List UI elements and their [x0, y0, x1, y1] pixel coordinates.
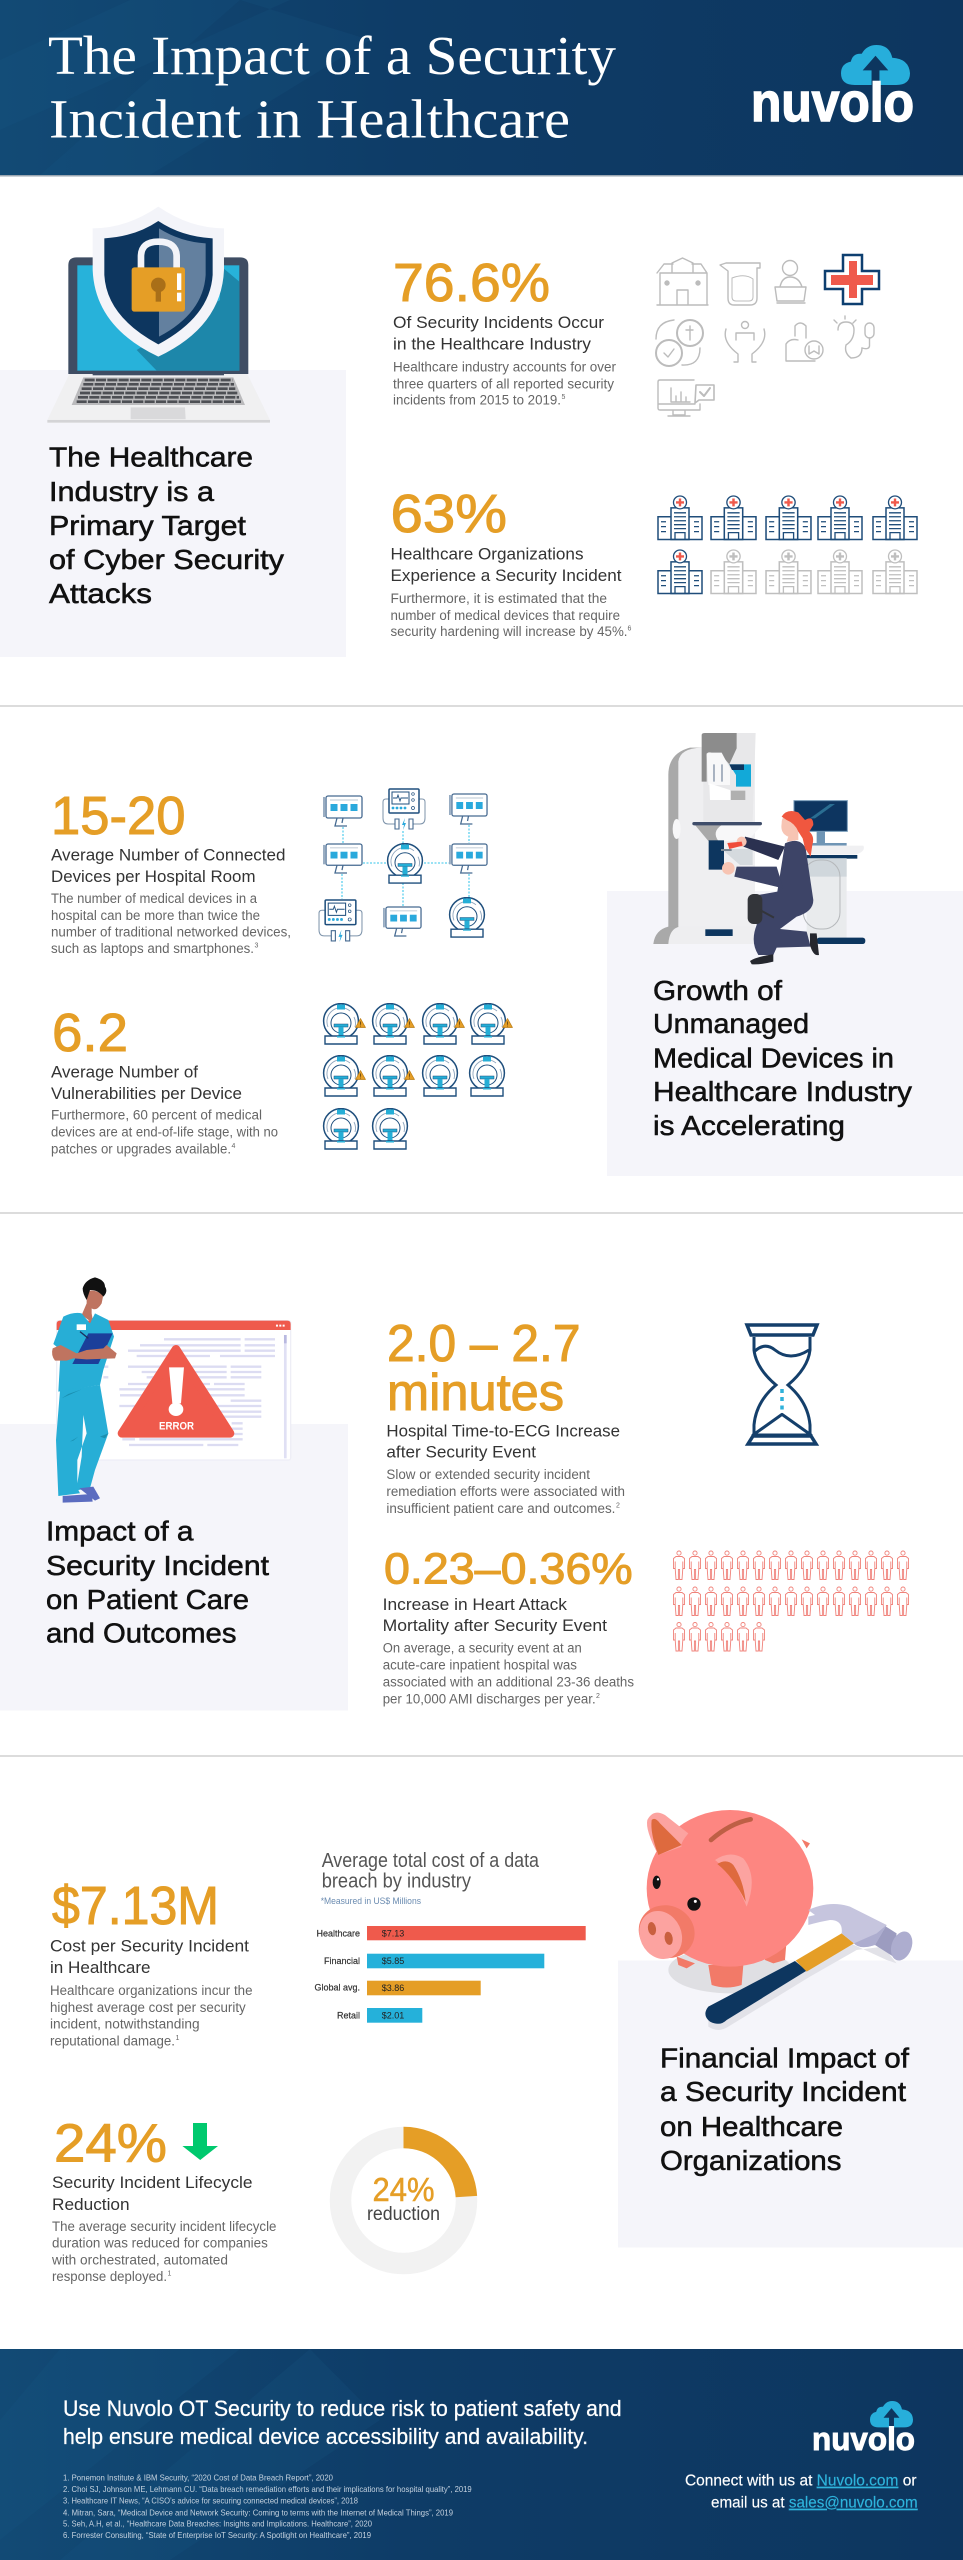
heading: unmanaged devices: Healthcare Industry [653, 1076, 912, 1107]
stat: 76.6% [393, 253, 617, 408]
stat: 15-20: such as laptops and smartphones. [51, 941, 254, 956]
stat: 6.2: 4 [232, 1143, 236, 1150]
stat: 15-20: 3 [254, 942, 258, 950]
stat: 6.2: Vulnerabilities per Device [51, 1084, 242, 1103]
chart title: *Measured in US$ Millions [321, 1896, 421, 1907]
stat: $7.13M: 1 [176, 2035, 180, 2042]
stat: 63%: 63% [390, 484, 507, 544]
stat: 2.0 – 2.7 minutes [386, 1315, 625, 1516]
panel: primary target background [0, 370, 346, 657]
stat: 2.0 – 2.7 minutes: minutes [387, 1364, 564, 1422]
contact details: email us at sales@nuvolo.com [711, 2495, 918, 2512]
references: 1. Ponemon Institute & IBM Security, “2020 Cost of Data Breach Report”, 2020 [63, 2473, 333, 2483]
pig body [802, 1839, 810, 1848]
stat: $7.13M: in Healthcare [50, 1958, 150, 1977]
bar: healthcare: Healthcare [316, 1929, 360, 1939]
stat: 76.6%: 5 [562, 394, 566, 401]
stat: 76.6%: 76.6% [393, 253, 550, 313]
stat: 24% [54, 2113, 218, 2173]
icon: hourglass [747, 1325, 817, 1444]
heading: primary target: Industry is a [49, 476, 214, 507]
stat: 15-20 [51, 786, 291, 956]
stat: $7.13M: incident, notwithstanding [50, 2017, 200, 2032]
logo: footer nuvolo [812, 2401, 915, 2457]
references: 3. Healthcare IT News, “A CISO’s advice for securing connected medical devices”, 2018 [63, 2496, 358, 2506]
chart title: Average total cost of a data [322, 1850, 540, 1872]
stat: 76.6%: Healthcare industry accounts for over [393, 360, 617, 374]
stat: $7.13M: Cost per Security Incident [50, 1937, 249, 1956]
bar: global average: $3.86 [382, 1983, 404, 1993]
logo: nuvolo: nuvolo [751, 71, 914, 133]
heading: primary target: The Healthcare [49, 442, 253, 472]
icon: green down arrow [182, 2123, 218, 2160]
icons: people pictogram [674, 1551, 908, 1651]
references: 6. Forrester Consulting, “State of Enterprise IoT Security: A Spotlight on Healthcare”, 2019 [63, 2530, 371, 2540]
diagram: connected devices network [319, 789, 487, 942]
heading: primary target [49, 442, 284, 609]
icon: monitor with chart [658, 380, 714, 416]
stat: $7.13M: Healthcare organizations incur the [50, 1983, 252, 1998]
stat: 2.0 – 2.7 minutes: insufficient patient care and outcomes. [386, 1501, 615, 1516]
contact details [685, 2473, 918, 2512]
donut chart: 24% reduction [340, 2138, 466, 2264]
title: The Impact of a Security [48, 25, 617, 86]
stat: 0.23–0.36%: 0.23–0.36% [384, 1544, 633, 1593]
logo: nuvolo [751, 45, 914, 133]
hammer shadow [708, 1940, 897, 2030]
stat: 2.0 – 2.7 minutes: 2.0 – 2.7 [387, 1315, 580, 1373]
stat: 6.2: devices are at end-of-life stage, with no [51, 1124, 278, 1140]
icon: ear and mouse [834, 316, 874, 358]
bar: retail: $2.01 [382, 2011, 404, 2021]
bar: global average: Global avg. [314, 1982, 360, 1992]
references [63, 2473, 472, 2540]
desk and monitor [794, 801, 865, 944]
text: lifecycle reduction: Security Incident Lifecycle [52, 2173, 252, 2192]
panel: financial impact background [618, 1960, 963, 2248]
text: lifecycle reduction [51, 2173, 276, 2284]
stat: 2.0 – 2.7 minutes: Slow or extended security incident [386, 1467, 590, 1482]
references: 2. Choi SJ, Johnson ME, Lehmann CU. “Data breach remediation efforts and their implications for hospital quality”, 2019 [63, 2484, 472, 2494]
icon: person at laptop [775, 260, 806, 303]
stat: 63%: security hardening will increase by 45%. [390, 624, 628, 639]
technician [721, 811, 819, 964]
bar: financial: Financial [324, 1956, 360, 1966]
bar: financial: $5.85 [382, 1956, 404, 1966]
stat: 15-20: Devices per Hospital Room [51, 867, 256, 886]
illustration: error window: ERROR [159, 1420, 194, 1432]
stat: 15-20: 15-20 [51, 786, 186, 846]
donut chart: 24% reduction: 24% [372, 2171, 434, 2208]
stat: 15-20: Average Number of Connected [51, 846, 286, 864]
stat: 2.0 – 2.7 minutes: remediation efforts were associated with [386, 1484, 625, 1499]
stat: $7.13M: $7.13M [52, 1876, 219, 1936]
text: lifecycle reduction: 1 [168, 2270, 172, 2278]
heading: financial impact: on Healthcare [660, 2111, 843, 2142]
icons: industry grid [656, 255, 879, 416]
stat: 2.0 – 2.7 minutes: after Security Event [386, 1443, 536, 1462]
stat: 0.23–0.36%: Mortality after Security Event [383, 1616, 607, 1635]
stat: 2.0 – 2.7 minutes: Hospital Time-to-ECG Increase [386, 1421, 620, 1440]
stat: 0.23–0.36%: Increase in Heart Attack [383, 1595, 568, 1614]
stat: 0.23–0.36%: associated with an additional 23-36 deaths [383, 1674, 634, 1690]
heading: patient care [46, 1516, 269, 1649]
icons: hospitals 6.3 of 10 [658, 496, 917, 594]
stat: 24%: 24% [54, 2113, 167, 2173]
stat: 63%: Experience a Security Incident [390, 566, 622, 585]
heading: financial impact: Organizations [660, 2145, 842, 2176]
pig legs [765, 1940, 787, 1963]
stat: 0.23–0.36%: per 10,000 AMI discharges per year. [383, 1691, 596, 1706]
heading: unmanaged devices: is Accelerating [653, 1110, 845, 1141]
stat: $7.13M: reputational damage. [50, 2033, 175, 2048]
stat: 2.0 – 2.7 minutes: 2 [616, 1502, 620, 1510]
illustration: error window [57, 1321, 291, 1460]
panel: unmanaged devices background [607, 891, 963, 1176]
heading: primary target: Primary Target [49, 510, 246, 541]
title [48, 25, 617, 150]
text: lifecycle reduction: response deployed. [52, 2269, 167, 2284]
stat: 76.6%: Of Security Incidents Occur [393, 313, 604, 332]
warning triangle [122, 1349, 230, 1433]
donut chart: 24% reduction: reduction [367, 2204, 440, 2225]
shield [93, 207, 224, 357]
heading: financial impact: a Security Incident [660, 2076, 906, 2107]
stat: 15-20: number of traditional networked devices, [51, 924, 291, 940]
bar: global average [314, 1981, 481, 1995]
stat: 63%: number of medical devices that require [390, 608, 620, 623]
stat: 0.23–0.36%: 2 [596, 1693, 600, 1700]
stat: 63%: Furthermore, it is estimated that the [390, 591, 607, 606]
stat: 6.2: patches or upgrades available. [51, 1141, 231, 1156]
illustration: piggy bank and hammer [630, 1810, 916, 2030]
heading: unmanaged devices: Growth of [653, 975, 782, 1006]
stat: 0.23–0.36% [383, 1544, 634, 1706]
header banner [0, 0, 963, 176]
contact details: Connect with us at Nuvolo.com or [685, 2473, 916, 2490]
chart title: breach by industry [322, 1871, 471, 1893]
stat: 76.6%: in the Healthcare Industry [393, 334, 592, 354]
hammer [705, 1961, 807, 2024]
stat: 63%: Healthcare Organizations [390, 544, 584, 564]
heading: financial impact [660, 2043, 909, 2176]
references: 4. Mitran, Sara, “Medical Device and Network Security: Coming to terms with the Internet of Medical Things”, 2019 [63, 2507, 453, 2517]
padlock [141, 242, 177, 268]
stat: 76.6%: three quarters of all reported security [393, 376, 614, 392]
bar: retail [337, 2008, 422, 2023]
stat: 6.2: Average Number of [51, 1062, 198, 1082]
logo: footer nuvolo: nuvolo [812, 2421, 915, 2457]
stat: 6.2 [51, 1003, 278, 1156]
heading: unmanaged devices [653, 975, 912, 1141]
icon: money and check cycle [656, 320, 703, 366]
heading: primary target: Attacks [49, 578, 152, 609]
bar: retail: Retail [337, 2011, 360, 2021]
stat: $7.13M: highest average cost per security [50, 2000, 246, 2015]
icon: school building [657, 258, 708, 305]
icons: vulnerable devices grid [324, 1004, 512, 1149]
imaging machine [653, 733, 762, 944]
stat: 63% [390, 484, 632, 639]
stat: 15-20: hospital can be more than twice the [51, 908, 260, 923]
illustration: nurse [52, 1277, 117, 1503]
stat: 63%: 6 [628, 626, 632, 632]
stat: 76.6%: incidents from 2015 to 2019. [393, 392, 561, 408]
heading: patient care: and Outcomes [46, 1618, 236, 1649]
heading: unmanaged devices: Unmanaged [653, 1008, 809, 1039]
bar chart: average cost by industry [314, 1850, 586, 2023]
icon: caring hands [725, 322, 765, 362]
call to action: help ensure medical device accessibility and availability. [63, 2424, 588, 2449]
text: lifecycle reduction: with orchestrated, automated [51, 2253, 228, 2268]
bar: financial [324, 1954, 544, 1968]
heading: financial impact: Financial Impact of [660, 2043, 909, 2074]
chart title [321, 1850, 540, 1907]
stat: $7.13M [50, 1876, 252, 2048]
text: lifecycle reduction: Reduction [52, 2195, 130, 2214]
icon: medical cross [825, 255, 879, 304]
heading: primary target: of Cyber Security [49, 544, 284, 575]
icon: woman with book [786, 323, 823, 361]
icon: laptop with security shield [47, 207, 270, 423]
stat: 6.2: 6.2 [52, 1003, 128, 1063]
call to action [63, 2396, 622, 2449]
title: Incident in Healthcare [49, 88, 570, 150]
text: lifecycle reduction: duration was reduced for companies [52, 2236, 268, 2250]
heading: unmanaged devices: Medical Devices in [653, 1042, 894, 1074]
heading: patient care: Security Incident [46, 1550, 269, 1581]
icon: beaker [720, 263, 760, 305]
stat: 15-20: The number of medical devices in a [51, 891, 257, 906]
illustration: technician at imaging machine [653, 733, 865, 964]
bar: healthcare: $7.13 [382, 1929, 404, 1939]
stat: 0.23–0.36%: On average, a security event at an [383, 1641, 582, 1656]
panel: patient care background [0, 1424, 348, 1710]
text: lifecycle reduction: The average security incident lifecycle [52, 2219, 276, 2234]
heading: patient care: on Patient Care [46, 1584, 249, 1615]
footer banner [0, 2349, 963, 2560]
call to action: Use Nuvolo OT Security to reduce risk to patient safety and [63, 2396, 622, 2421]
stat: 6.2: Furthermore, 60 percent of medical [51, 1108, 262, 1123]
references: 5. Seh, A.H, et al., “Healthcare Data Breaches: Insights and Implications. Healthcare”, 2020 [63, 2519, 372, 2529]
heading: patient care: Impact of a [46, 1516, 194, 1546]
stat: 0.23–0.36%: acute-care inpatient hospital was [383, 1658, 577, 1673]
bar: healthcare [316, 1926, 586, 1940]
